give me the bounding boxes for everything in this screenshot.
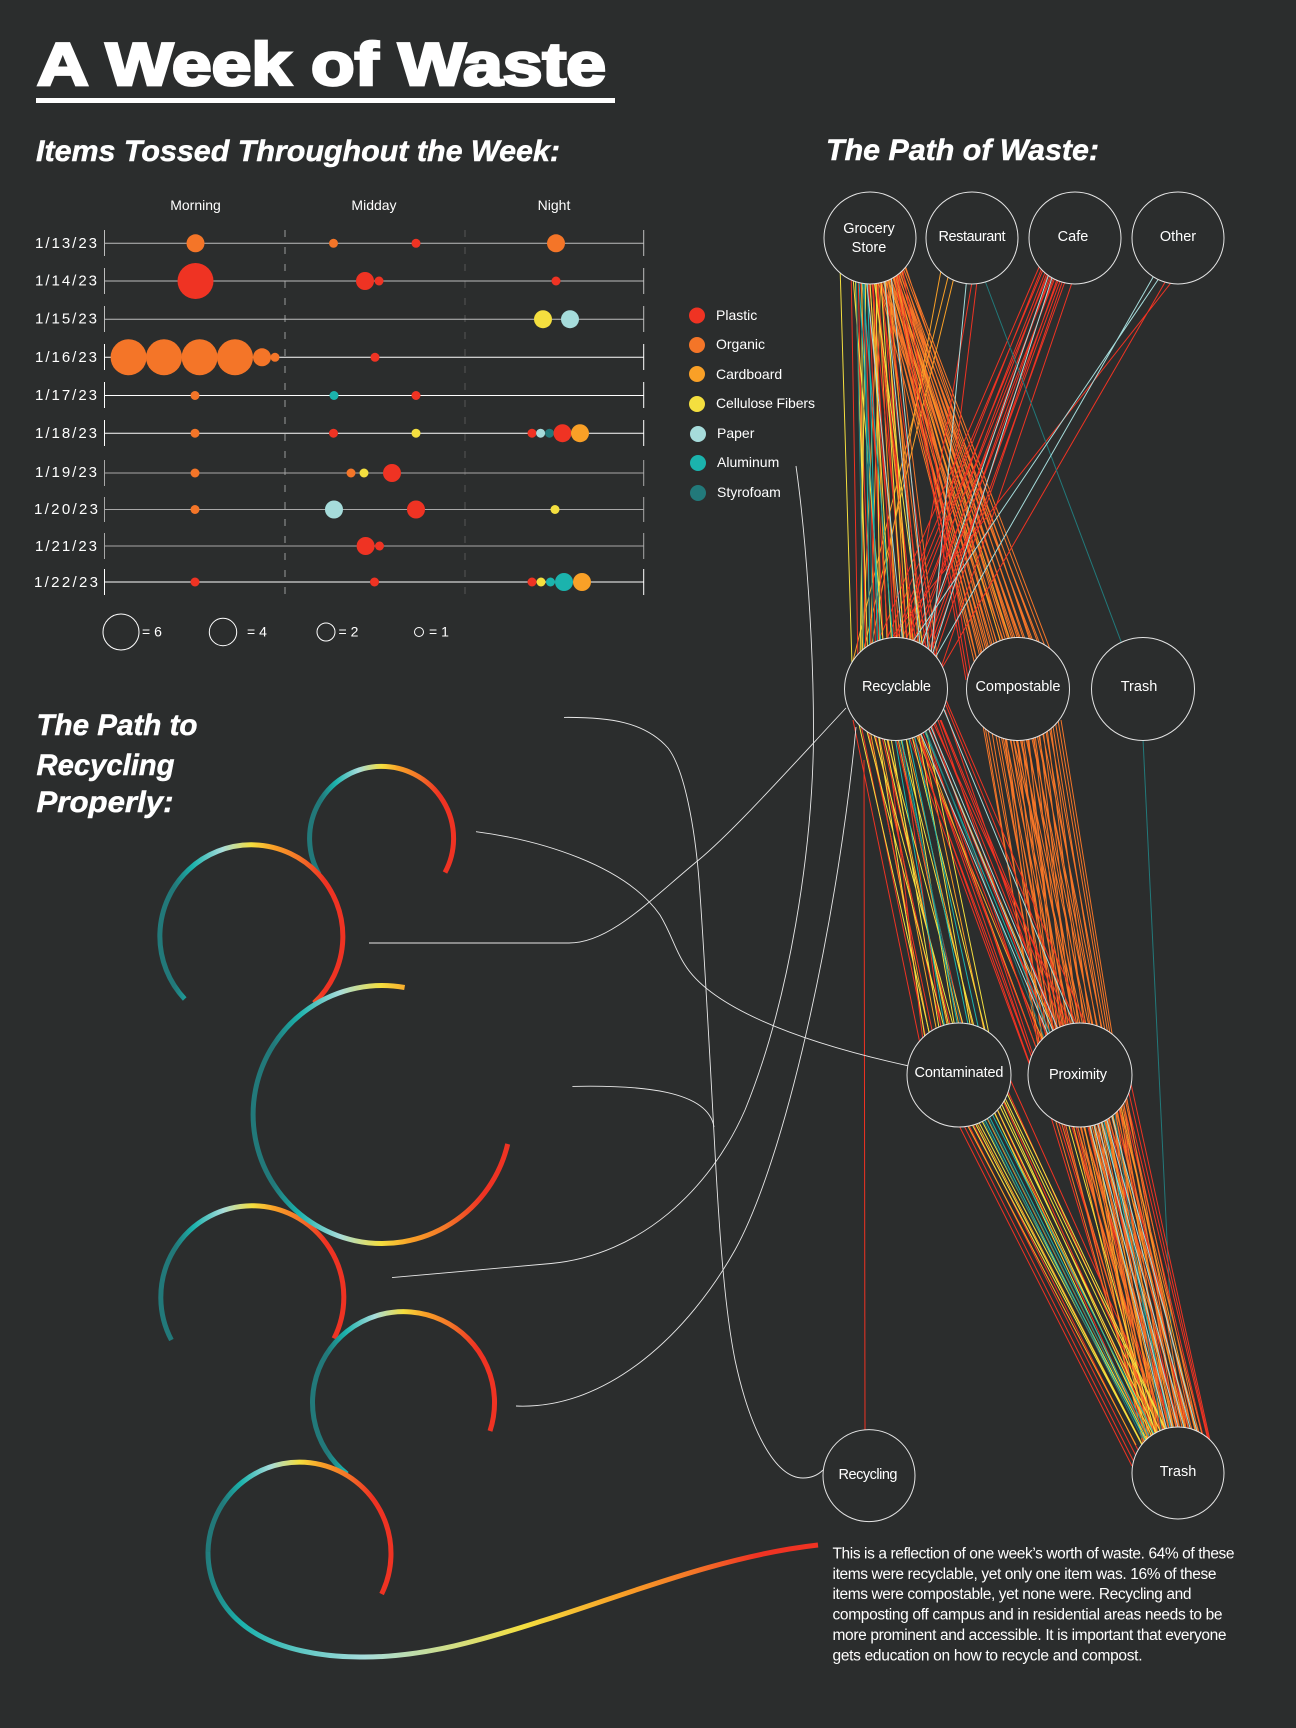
row 1/22 bubbles bbox=[190, 573, 591, 591]
gradient tail bbox=[208, 1545, 818, 1657]
text block: summary: This is a reflection of one week’s worth of waste. 64% of these bbox=[832, 1546, 1234, 1562]
heading: path to recycling: The Path to bbox=[36, 709, 198, 742]
node: Proximity bbox=[1028, 1023, 1132, 1127]
chart: flow lines from sorting categories to barriers bbox=[853, 700, 1176, 1430]
node: Grocery Store bbox=[824, 192, 916, 284]
date labels: 1/21/23 bbox=[35, 538, 97, 555]
text block: summary bbox=[832, 1546, 1234, 1665]
row 1/21 bubbles bbox=[357, 537, 384, 555]
heading: path of waste: The Path of Waste: bbox=[826, 134, 1099, 167]
row 1/16 bubbles bbox=[111, 339, 380, 375]
chart: flow lines from barriers to final trash bbox=[943, 1079, 1211, 1466]
size legend: = 6 bbox=[142, 624, 162, 640]
gradient arc 6 bbox=[208, 1462, 391, 1594]
colour legend: Cellulose Fibers bbox=[716, 395, 815, 411]
node: Recyclable bbox=[844, 638, 948, 740]
row 1/13 bubbles bbox=[186, 234, 565, 252]
gradient arc 2 bbox=[160, 845, 343, 1003]
colour legend: Cardboard bbox=[716, 366, 782, 382]
gradient arc 4 bbox=[161, 1206, 344, 1340]
node: Recycling: Recycling bbox=[838, 1467, 898, 1483]
date labels: 1/20/23 bbox=[34, 501, 98, 518]
connector curve: to contaminated bbox=[476, 832, 909, 1066]
date labels: 1/15/23 bbox=[35, 310, 97, 328]
date labels: 1/13/23 bbox=[35, 235, 97, 252]
date labels: 1/18/23 bbox=[35, 425, 97, 442]
text block: summary: items were compostable, yet none were. Recycling and bbox=[832, 1586, 1192, 1603]
panel: timeline chart bbox=[34, 197, 644, 595]
row 1/14 bubbles bbox=[178, 263, 560, 299]
text block: summary: items were recyclable, yet only one item was. 16% of these bbox=[832, 1566, 1216, 1583]
connector curve: to recyclable bottom bbox=[516, 727, 856, 1406]
date labels bbox=[34, 235, 98, 591]
time of day headers bbox=[170, 197, 570, 213]
colour legend: Organic bbox=[716, 336, 765, 352]
node: Other: Other bbox=[1160, 229, 1196, 245]
row 1/17 bubbles bbox=[190, 391, 420, 400]
title: A Week of Waste bbox=[37, 31, 606, 98]
node: Cafe bbox=[1029, 192, 1121, 284]
size legend bbox=[103, 614, 449, 650]
colour legend bbox=[689, 307, 815, 501]
time of day headers: Morning bbox=[170, 197, 221, 213]
node: Trash middle bbox=[1092, 638, 1194, 740]
colour legend: Styrofoam bbox=[717, 484, 781, 500]
time of day headers: Night bbox=[538, 197, 570, 213]
node: Trash final bbox=[1132, 1427, 1224, 1519]
node: Recycling bbox=[823, 1430, 915, 1522]
node: Grocery Store: Grocery bbox=[843, 221, 896, 237]
node: Cafe: Cafe bbox=[1058, 229, 1088, 245]
row 1/15 bubbles bbox=[534, 310, 579, 328]
size legend: = 2 bbox=[338, 624, 359, 640]
row 1/19 bubbles bbox=[190, 464, 401, 482]
colour legend: Aluminum bbox=[717, 454, 779, 470]
node: Restaurant bbox=[926, 192, 1018, 284]
date labels: 1/14/23 bbox=[35, 272, 97, 290]
size legend: = 1 bbox=[429, 624, 449, 640]
connector curve: short branch bbox=[572, 1086, 714, 1127]
colour legend: Paper bbox=[717, 425, 755, 441]
node: Grocery Store: Store bbox=[852, 240, 886, 256]
text block: summary: composting off campus and in residential areas needs to be bbox=[832, 1606, 1222, 1624]
heading: path to recycling: Properly: bbox=[36, 786, 174, 819]
date labels: 1/19/23 bbox=[35, 464, 97, 481]
connector curve: to recyclable bbox=[369, 708, 846, 943]
connector curve: to recycling bbox=[564, 717, 823, 1478]
node: Proximity: Proximity bbox=[1049, 1067, 1108, 1083]
colour legend: Plastic bbox=[716, 307, 757, 323]
node: Contaminated bbox=[907, 1023, 1011, 1127]
connector curve: to legend gap bbox=[392, 466, 814, 1278]
text block: summary: more prominent and accessible. It is important that everyone bbox=[832, 1627, 1226, 1644]
text block: summary: gets education on how to recycle and compost. bbox=[832, 1648, 1142, 1665]
heading: path to recycling: Recycling bbox=[36, 749, 174, 782]
row 1/18 bubbles bbox=[190, 424, 589, 442]
gradient arc 5 bbox=[313, 1312, 495, 1474]
node: Compostable bbox=[966, 638, 1070, 740]
date labels: 1/17/23 bbox=[35, 387, 97, 404]
node: Other bbox=[1132, 192, 1224, 284]
node: Recyclable: Recyclable bbox=[862, 679, 931, 695]
node: Trash final: Trash bbox=[1160, 1464, 1196, 1480]
gradient arc 3 bbox=[253, 986, 508, 1244]
heading: path to recycling bbox=[36, 709, 198, 819]
node: Restaurant: Restaurant bbox=[938, 229, 1006, 245]
node: Compostable: Compostable bbox=[976, 679, 1060, 695]
date labels: 1/16/23 bbox=[35, 349, 97, 366]
gradient arc 1 bbox=[310, 766, 454, 874]
heading: items tossed: Items Tossed Throughout the Week: bbox=[36, 135, 560, 168]
chart: flow lines from sources to sorting categories bbox=[840, 265, 1185, 680]
row 1/20 bubbles bbox=[190, 500, 560, 518]
node: Trash middle: Trash bbox=[1121, 679, 1157, 695]
row axes bbox=[104, 230, 644, 595]
node: Contaminated: Contaminated bbox=[914, 1065, 1004, 1081]
date labels: 1/22/23 bbox=[34, 574, 98, 591]
time of day headers: Midday bbox=[351, 197, 397, 213]
size legend: = 4 bbox=[247, 624, 267, 640]
